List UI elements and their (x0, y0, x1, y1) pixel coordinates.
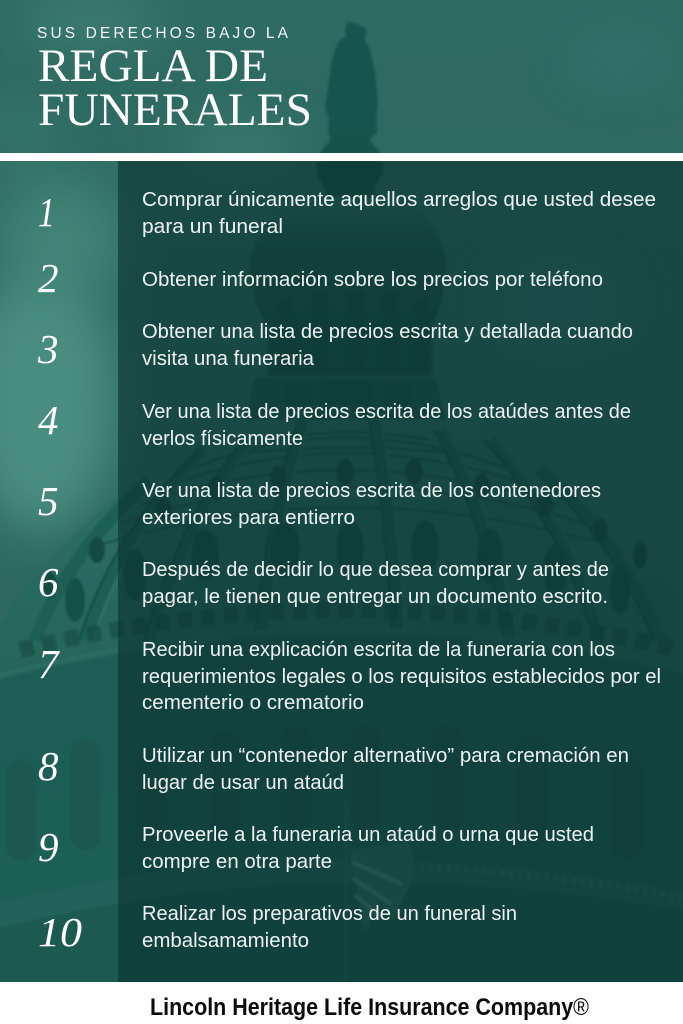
dome panels (65, 520, 630, 622)
panel: left number column tint (0, 161, 118, 982)
item 5 text: exteriores para entierro (142, 506, 355, 529)
item 8 text (142, 744, 629, 794)
number 5: 5 (38, 478, 58, 524)
number 2: 2 (38, 255, 58, 301)
item 1 text: para un funeral (142, 215, 283, 238)
number 10: 10 (38, 909, 82, 955)
footer company name: Lincoln Heritage Life Insurance Company® (150, 994, 589, 1021)
finials (43, 458, 647, 598)
eyebrow heading: SUS DERECHOS BAJO LA (37, 25, 289, 42)
number 7: 7 (38, 641, 60, 687)
number 6: 6 (38, 559, 59, 605)
number 4: 4 (38, 397, 58, 443)
flag (345, 800, 347, 985)
white divider band (0, 153, 683, 161)
balustrade (0, 860, 683, 930)
drum (0, 635, 683, 1000)
item 3 text (142, 320, 633, 370)
statue (325, 22, 378, 142)
tholos (250, 196, 446, 376)
panel: right dark list background (118, 161, 683, 982)
item 4 text: verlos físicamente (142, 427, 303, 450)
item 1 text: Comprar únicamente aquellos arreglos que usted desee (142, 188, 656, 211)
title: REGLA DE (38, 40, 268, 92)
item 10 text: Realizar los preparativos de un funeral sin (142, 902, 517, 925)
item 10 text (142, 902, 517, 952)
title (38, 40, 312, 136)
item 5 text (142, 479, 601, 529)
dome (0, 378, 683, 1000)
item 9 text: Proveerle a la funeraria un ataúd o urna que usted (142, 823, 594, 846)
footer band (0, 982, 683, 1024)
number 8: 8 (38, 743, 59, 789)
item 10 text: embalsamamiento (142, 929, 309, 952)
ornament band (20, 610, 680, 650)
item 6 text (142, 558, 609, 608)
item 3 text: visita una funeraria (142, 347, 315, 370)
item 9 text: compre en otra parte (142, 850, 332, 873)
ribs (35, 420, 660, 640)
item 6 text: pagar, le tienen que entregar un documento escrito. (142, 585, 608, 608)
item 4 text (142, 400, 631, 450)
item 5 text: Ver una lista de precios escrita de los contenedores (142, 479, 601, 502)
item 7 text: requerimientos legales o los requisitos establecidos por el (142, 665, 661, 688)
item 8 text: lugar de usar un ataúd (142, 771, 344, 794)
item 3 text: Obtener una lista de precios escrita y detallada cuando (142, 320, 633, 343)
item 2 text: Obtener información sobre los precios por teléfono (142, 268, 603, 291)
number 3: 3 (37, 326, 58, 372)
horizontal ribbing on upper dome (100, 432, 610, 545)
item 4 text: Ver una lista de precios escrita de los ataúdes antes de (142, 400, 631, 423)
item 7 text: cementerio o crematorio (142, 691, 364, 714)
item 1 text (142, 188, 656, 238)
item 7 text: Recibir una explicación escrita de la funeraria con los (142, 638, 615, 661)
item 8 text: Utilizar un “contenedor alternativo” para cremación en (142, 744, 629, 767)
item 7 text (142, 638, 661, 714)
title: FUNERALES (38, 84, 312, 136)
item 6 text: Después de decidir lo que desea comprar y antes de (142, 558, 609, 581)
number 1: 1 (38, 189, 55, 235)
number 9: 9 (38, 824, 58, 870)
item 9 text (142, 823, 594, 873)
